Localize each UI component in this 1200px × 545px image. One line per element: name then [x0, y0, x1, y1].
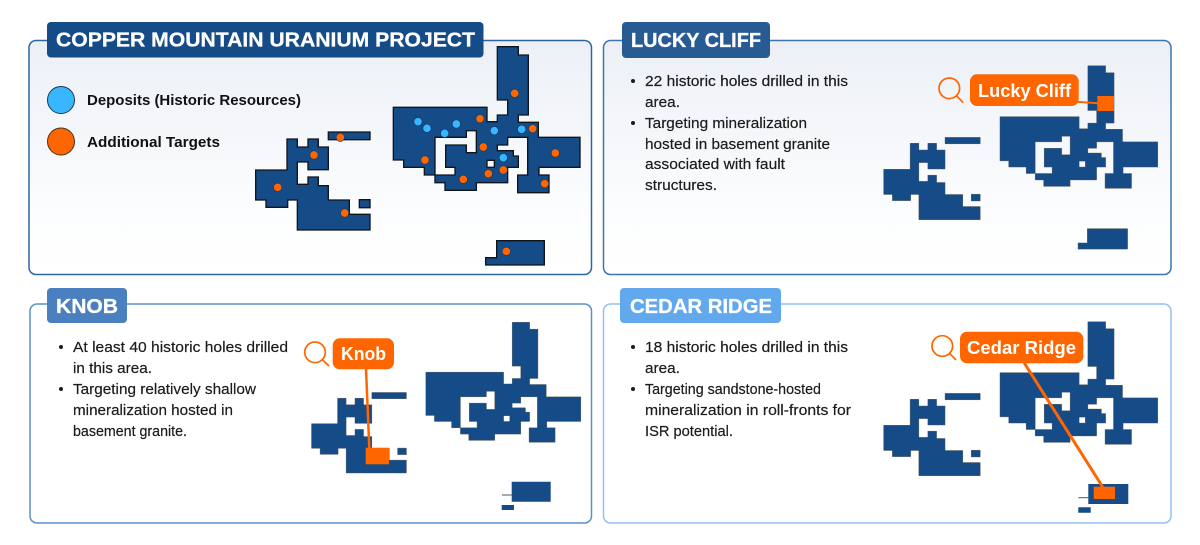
text: Knob bullets: At least 40 historic holes drilled — [73, 339, 288, 356]
text: Knob bullets: mineralization hosted in — [73, 402, 233, 419]
callout: Lucky Cliff location — [970, 74, 1114, 111]
legend: Deposits (Historic Resources) — [87, 92, 301, 109]
heading: Copper Mountain Uranium Project: COPPER MOUNTAIN URANIUM PROJECT — [56, 30, 475, 52]
text: Cedar Ridge bullets: mineralization in roll-fronts for — [645, 402, 851, 419]
text: Lucky Cliff bullets: hosted in basement granite — [645, 136, 830, 153]
panel: Copper Mountain Uranium Project — [29, 22, 592, 274]
text: Lucky Cliff bullets: structures. — [645, 177, 717, 194]
icon: magnifier — [939, 78, 963, 103]
callout: Knob location: Knob — [341, 344, 386, 364]
map: Lucky Cliff — [884, 66, 1158, 249]
text: Lucky Cliff bullets: area. — [645, 94, 680, 111]
panel: Knob — [30, 288, 592, 523]
callout: Lucky Cliff location: Lucky Cliff — [978, 81, 1072, 101]
callout: Cedar Ridge location — [960, 332, 1115, 499]
panel: Cedar Ridge — [604, 288, 1171, 523]
legend: Additional Targets — [87, 134, 220, 151]
heading: Cedar Ridge — [620, 288, 781, 323]
text: Lucky Cliff bullets: 22 historic holes drilled in this — [645, 73, 848, 90]
callout: Knob location — [333, 338, 394, 464]
text: Cedar Ridge bullets: 18 historic holes drilled in this — [645, 339, 848, 356]
legend — [48, 86, 301, 155]
deposit markers — [414, 117, 526, 162]
map: Knob — [305, 322, 581, 510]
heading: Lucky Cliff — [622, 22, 770, 58]
heading: Knob: KNOB — [56, 296, 118, 318]
heading: Lucky Cliff: LUCKY CLIFF — [631, 30, 761, 52]
icon: magnifier — [305, 342, 329, 366]
text: Knob bullets: in this area. — [73, 360, 152, 377]
text: Lucky Cliff bullets — [631, 73, 848, 194]
text: Knob bullets — [59, 339, 288, 440]
text: Lucky Cliff bullets: Targeting mineralization — [645, 115, 807, 132]
heading: Cedar Ridge: CEDAR RIDGE — [630, 296, 772, 318]
text: Lucky Cliff bullets: associated with fault — [645, 156, 786, 173]
text: Knob bullets: Targeting relatively shallow — [73, 381, 256, 398]
text: Knob bullets: basement granite. — [73, 423, 187, 440]
text: Cedar Ridge bullets: ISR potential. — [645, 423, 733, 440]
panel: Lucky Cliff — [604, 22, 1171, 274]
text: Cedar Ridge bullets: Targeting sandstone-hosted — [645, 381, 821, 398]
heading: Copper Mountain Uranium Project — [47, 22, 484, 58]
icon: magnifier — [932, 336, 956, 360]
map: full project with deposits and targets — [256, 47, 580, 265]
text: Cedar Ridge bullets: area. — [645, 360, 680, 377]
text: Cedar Ridge bullets — [631, 339, 851, 440]
map: Cedar Ridge — [884, 322, 1158, 513]
target markers — [273, 89, 559, 255]
heading: Knob — [47, 288, 127, 323]
callout: Cedar Ridge location: Cedar Ridge — [967, 338, 1076, 358]
